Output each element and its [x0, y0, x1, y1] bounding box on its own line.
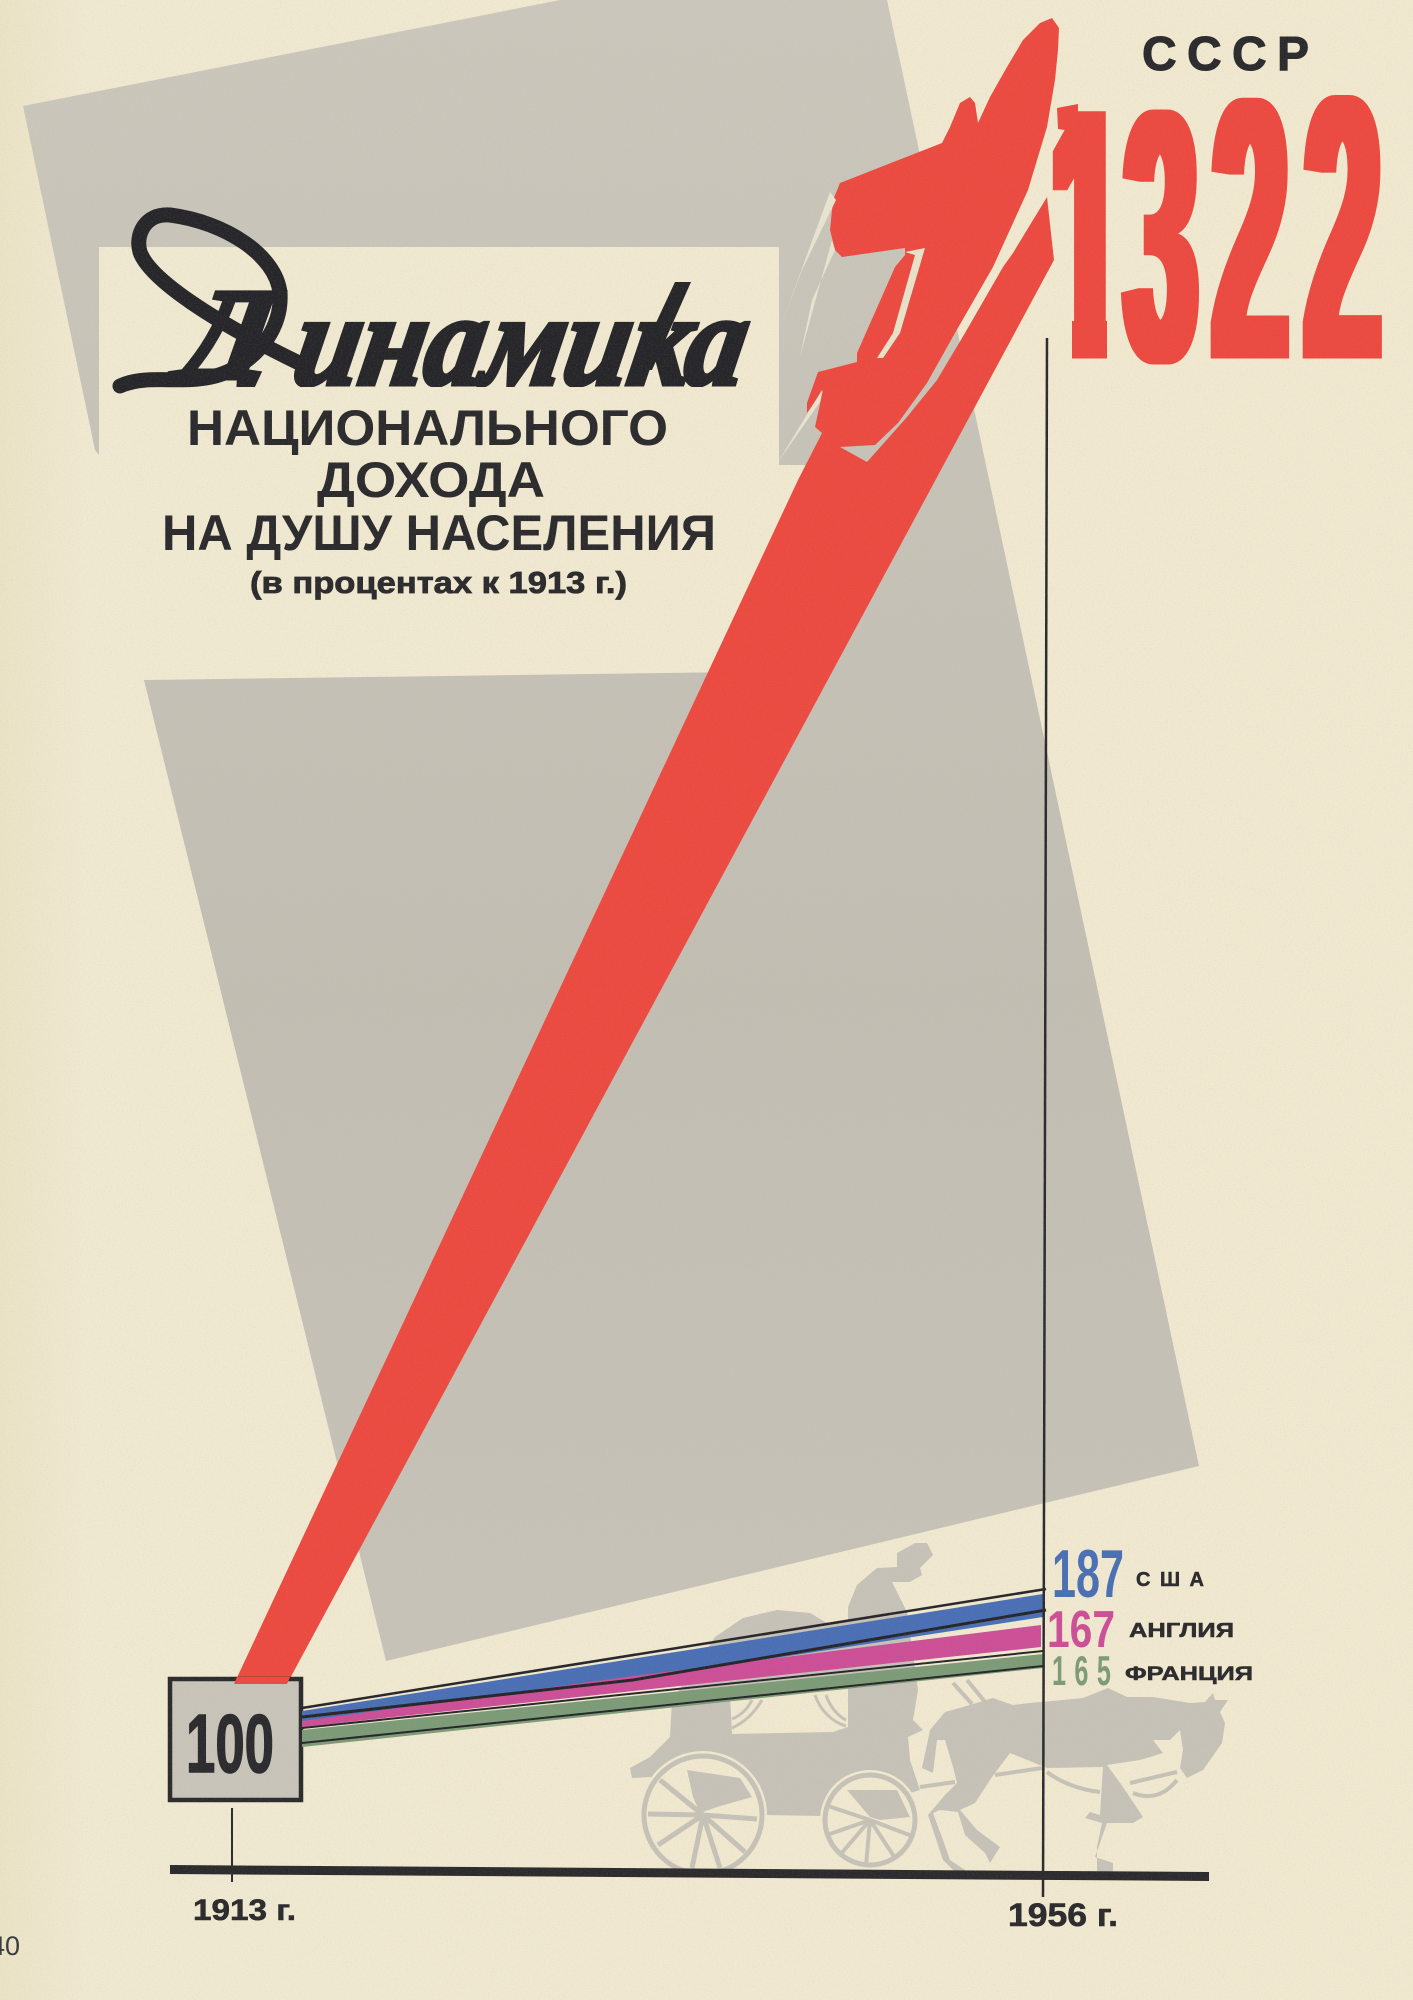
value 100: 100: [186, 1697, 274, 1790]
band outlines: [302, 1589, 1046, 1743]
subtitle line 1: НАЦИОНАЛЬНОГО: [187, 400, 668, 456]
title: script word: [120, 215, 761, 413]
digits 3 2 2: 3: [1125, 37, 1197, 437]
axis: horizontal time line: [170, 1865, 1209, 1881]
horse: [922, 1688, 1228, 1872]
title flourish: swash loop: [120, 215, 297, 386]
carriage body and driver: [630, 1543, 933, 1816]
heading: USSR: СССР: [1142, 28, 1309, 81]
plane and beam shape: [234, 18, 1059, 1684]
England pink band: [302, 1625, 1041, 1727]
subtitle line 3: НА ДУШУ НАСЕЛЕНИЯ: [162, 505, 716, 561]
digits 3 2 2: 2: [1305, 17, 1380, 438]
chart: comparison bands for USA, England and France: [302, 1589, 1046, 1747]
digits 3 2 2: 2: [1213, 23, 1287, 438]
value: USSR 1322: [1030, 17, 1380, 438]
label: 1956: 1956 г.: [1008, 1897, 1118, 1933]
illustration: horse-drawn carriage silhouette: [630, 1543, 1228, 1879]
value: USA 187: 187: [1052, 1536, 1124, 1612]
digits 3 2 2: [1125, 17, 1380, 438]
title: script word: Д: [162, 263, 291, 407]
France green band: [302, 1654, 1043, 1747]
label: 1913: 1913 г.: [193, 1894, 296, 1927]
subtitle line 2: ДОХОДА: [317, 452, 545, 508]
value: France 165: 165: [1052, 1649, 1119, 1695]
value: USSR 1322: 1: [1051, 35, 1123, 435]
label: USA: США: [1136, 1569, 1204, 1591]
axis: 1913 tick: [231, 1808, 233, 1882]
chart: 1913 base box with value: [170, 1677, 301, 1800]
axis: 1956 vertical line: [1043, 338, 1047, 1897]
front wheel: [820, 1770, 920, 1870]
harness: [920, 1680, 1177, 1796]
plane highlight strip: [877, 248, 925, 358]
label: France: ФРАНЦИЯ: [1125, 1664, 1253, 1685]
title: script word: инамика: [285, 269, 760, 413]
value: England 167: 167: [1047, 1601, 1115, 1659]
title flourish: ascender: [634, 282, 691, 370]
red beam overlap on box: [234, 1677, 290, 1684]
chart: red USSR beam with aeroplane: [234, 18, 1059, 1684]
plane vapour streaks: [778, 192, 836, 462]
flag of digit one: [1057, 104, 1078, 132]
label: England: АНГЛИЯ: [1129, 1620, 1234, 1642]
carriage window: [730, 1680, 848, 1734]
rear wheel: [639, 1751, 767, 1879]
USA blue band: [302, 1594, 1043, 1722]
carriage springs: [732, 1695, 846, 1728]
mask for foot of digit one: [1030, 312, 1137, 366]
subtitle note: (в процентах к 1913 г.): [250, 565, 627, 600]
panel: grey tilted background shape: [23, 0, 1199, 1661]
